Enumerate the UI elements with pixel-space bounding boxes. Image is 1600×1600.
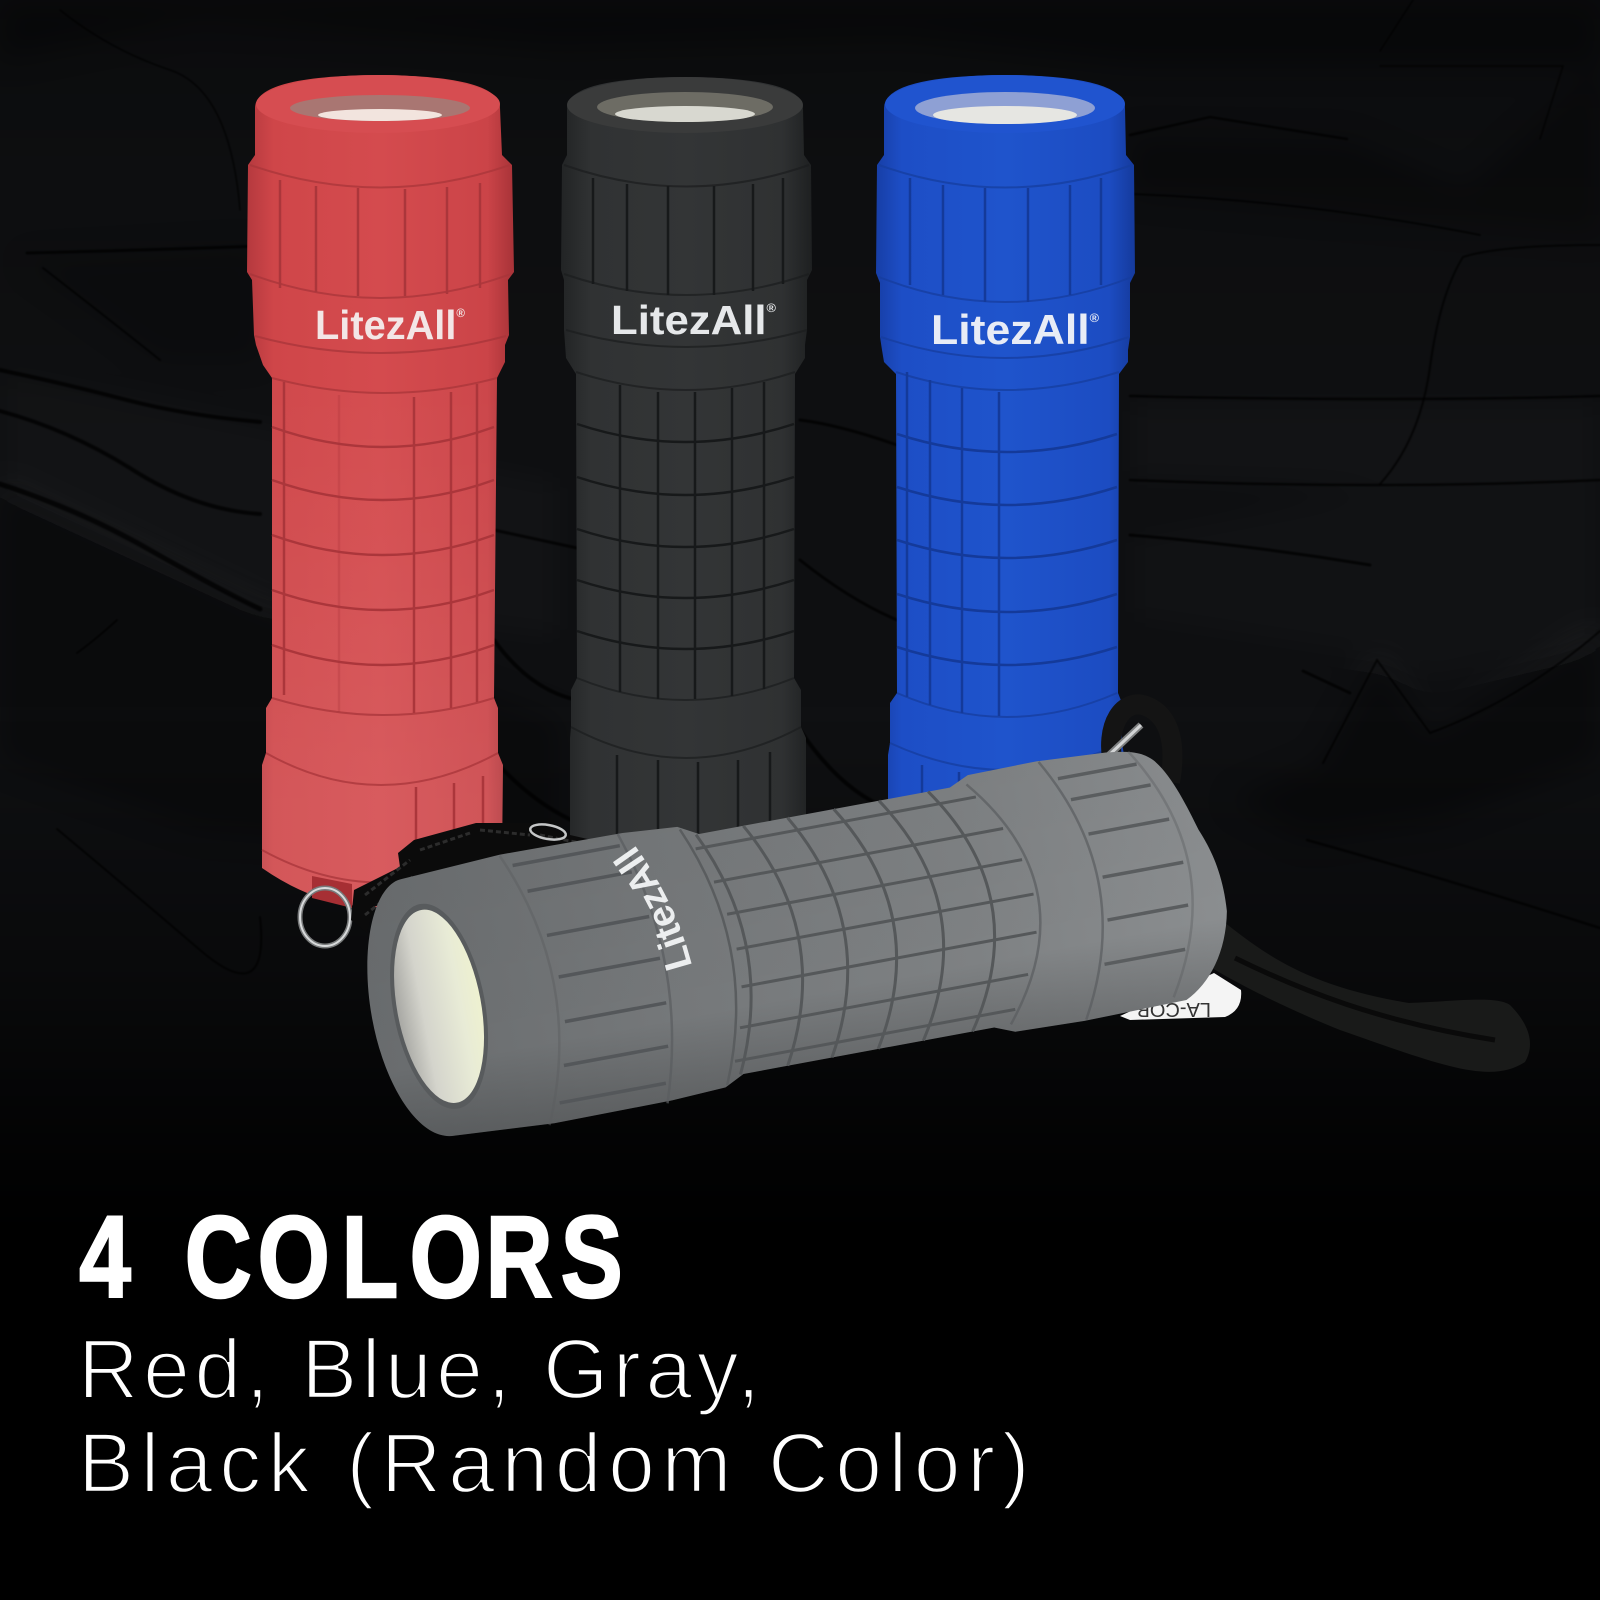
gray body silhouette <box>347 726 1243 1152</box>
blue lens opening <box>915 92 1095 124</box>
red front lip <box>256 75 500 133</box>
heading: 4 COLORS: 4 COLORS <box>79 1193 623 1322</box>
red logo: LitezAll <box>315 302 461 348</box>
black grip grooves <box>577 178 794 880</box>
gray front ring grooves <box>513 842 683 1103</box>
blue grip grooves <box>897 178 1117 830</box>
white product tag: LA-COB <box>1137 998 1211 1020</box>
wrist strap: right side <box>1212 915 1530 1072</box>
wrist strap: left side <box>351 822 640 933</box>
black body silhouette <box>561 77 812 900</box>
gray lens bezel and lens <box>375 896 503 1117</box>
red lens opening <box>290 95 470 121</box>
gray section edges <box>500 733 1214 1125</box>
black logo: LitezAll <box>611 297 757 343</box>
red logo: ® <box>456 306 465 320</box>
red end notch <box>312 876 352 908</box>
key ring on blue flashlight <box>1107 725 1141 757</box>
blue logo: LitezAll <box>931 306 1080 353</box>
blue section edges <box>879 165 1132 770</box>
blue front lip <box>885 75 1125 133</box>
black front lip <box>567 77 803 133</box>
black section edges <box>564 165 809 758</box>
red section edges <box>250 165 511 882</box>
flashlight: gray, lying at an angle <box>347 726 1243 1153</box>
black logo: ® <box>767 301 776 315</box>
subtext: color list: Red, Blue, Gray, <box>78 1322 765 1416</box>
key ring on red flashlight <box>300 888 350 946</box>
flashlight: blue <box>876 75 1135 850</box>
gray back ring grooves <box>1058 759 1199 967</box>
wrist strap loop behind gray flashlight <box>1111 704 1172 782</box>
gray underside shading <box>347 726 1243 1152</box>
gray flashlight logo: LitezAll <box>613 846 692 971</box>
gray body grid <box>693 776 1056 1075</box>
red grip grooves <box>272 180 494 872</box>
white product tag <box>1120 973 1241 1020</box>
blue body silhouette <box>876 75 1135 850</box>
blue logo: ® <box>1090 311 1099 325</box>
flashlight: black <box>561 77 812 900</box>
flashlight: red <box>247 75 514 908</box>
black lens opening <box>597 92 773 122</box>
subtext: color list: Black (Random Color) <box>78 1416 1036 1510</box>
red body silhouette <box>247 75 514 907</box>
red lower body lightening <box>262 378 503 907</box>
